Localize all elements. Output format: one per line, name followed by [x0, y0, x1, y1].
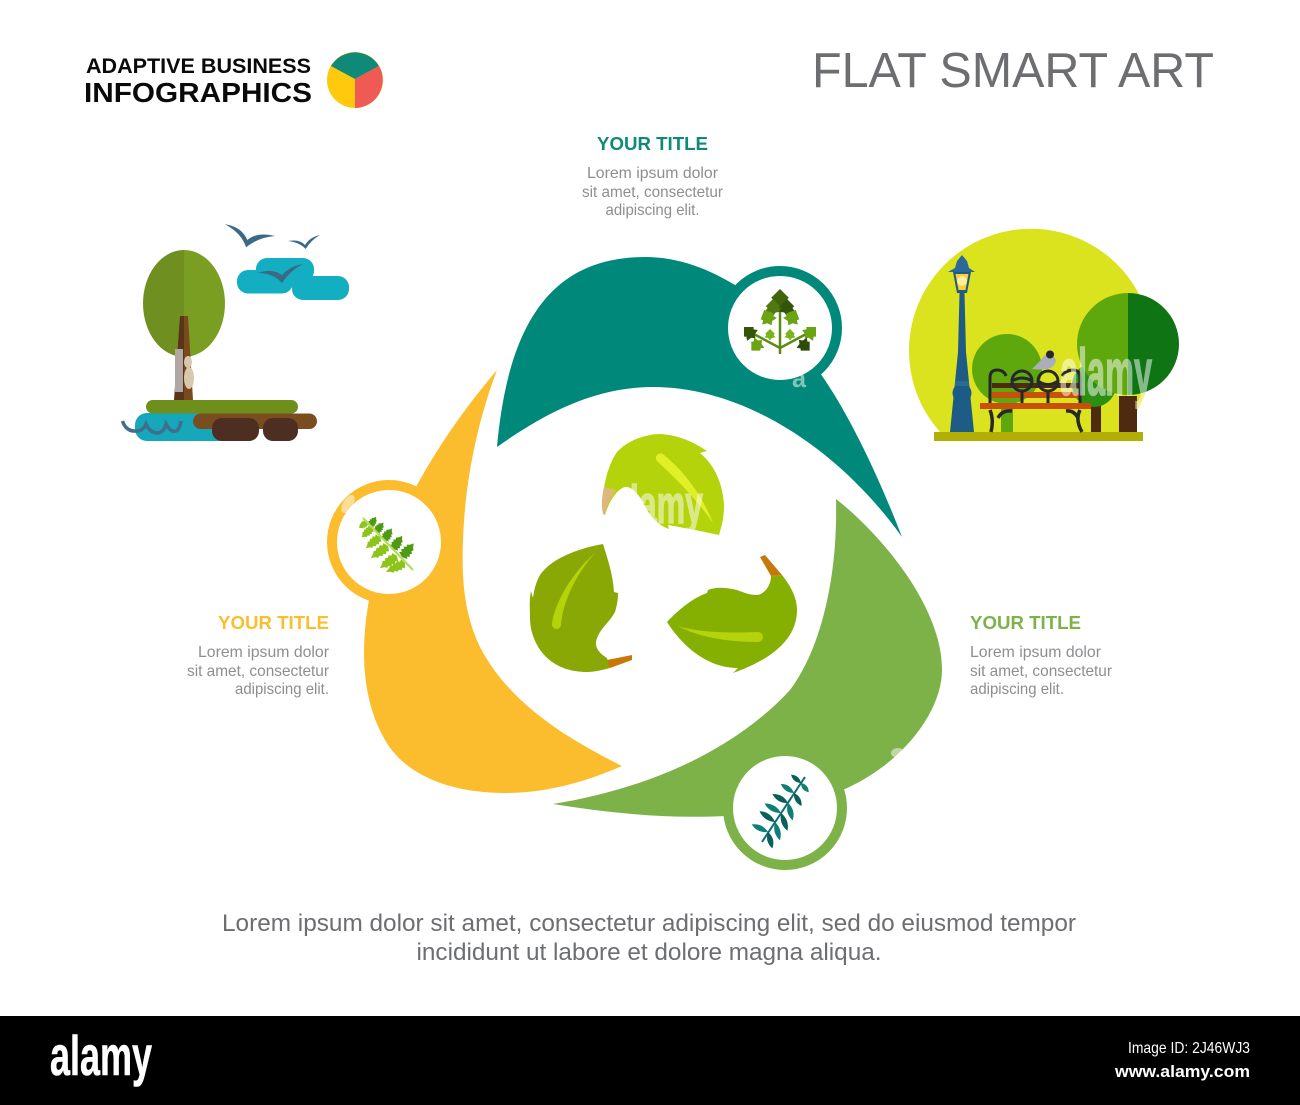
ring: fern	[332, 485, 446, 599]
text block: left: Lorem ipsum dolor	[198, 644, 330, 661]
text block: left: adipiscing elit.	[235, 681, 329, 698]
water	[135, 413, 222, 441]
segment watermark	[891, 748, 905, 758]
text block: right: sit amet, consectetur	[970, 663, 1113, 680]
logo: adaptive business infographics	[84, 52, 383, 108]
icon: fern	[357, 515, 418, 577]
ground	[934, 432, 1143, 441]
cycle segment: green	[553, 499, 942, 865]
small tree	[972, 334, 1042, 432]
leaf: top	[602, 434, 724, 535]
icon: ivy leaf	[739, 289, 821, 356]
watermark letter: a	[792, 363, 807, 393]
center leaves	[530, 434, 797, 673]
image id: Image ID: 2J46WJ3	[1128, 1040, 1250, 1057]
illustration: park bench and lamp	[909, 229, 1179, 441]
text block: right	[970, 612, 1113, 698]
text block: top	[582, 133, 724, 219]
rocks	[212, 418, 298, 441]
logo wordmark: ADAPTIVE BUSINESS	[86, 55, 311, 78]
tree trunk	[174, 316, 194, 400]
bottom caption: Lorem ipsum dolor sit amet, consectetur adipiscing elit, sed do eiusmod tempor	[222, 910, 1076, 937]
footer logo: alamy	[50, 1024, 152, 1087]
sun backdrop	[909, 229, 1153, 432]
footer bar	[0, 1016, 1300, 1105]
ring watermark	[339, 493, 357, 515]
birds	[225, 224, 320, 283]
logo wordmark	[84, 55, 312, 108]
text block: right: YOUR TITLE	[970, 612, 1081, 633]
bottom caption: incididunt ut labore et dolore magna aliqua.	[416, 939, 882, 966]
medium tree	[1072, 363, 1116, 432]
leaf watermark: alamy	[612, 475, 703, 535]
icon: rosemary sprig	[750, 773, 811, 849]
text block: left: sit amet, consectetur	[187, 663, 330, 680]
cycle segment: teal	[497, 257, 902, 537]
ring: ivy leaf	[723, 271, 837, 385]
soil	[193, 414, 317, 429]
street lamp	[948, 255, 975, 432]
logo pie icon	[327, 52, 383, 108]
website: www.alamy.com	[1114, 1062, 1250, 1081]
grass	[146, 400, 298, 414]
text block: right: Lorem ipsum dolor	[970, 644, 1102, 661]
text block: top: Lorem ipsum dolor	[587, 165, 719, 182]
text block: top: YOUR TITLE	[597, 133, 708, 154]
text block: top: sit amet, consectetur	[582, 184, 724, 201]
text block: left	[187, 612, 330, 698]
main title: FLAT SMART ART	[812, 44, 1214, 98]
text block: right: adipiscing elit.	[970, 681, 1064, 698]
bottom caption	[222, 910, 1076, 966]
ring: rosemary	[728, 751, 842, 865]
logo wordmark: INFOGRAPHICS	[84, 77, 312, 108]
large tree	[1077, 293, 1179, 432]
cycle segment: yellow	[332, 370, 622, 793]
illustration: tree, island and birds	[122, 224, 349, 441]
waves	[122, 421, 181, 433]
text block: top: adipiscing elit.	[606, 202, 700, 219]
leaf: right	[667, 555, 797, 673]
bench	[980, 370, 1091, 432]
tree crown	[143, 250, 225, 357]
clouds	[237, 258, 349, 300]
leaf: left	[530, 544, 632, 672]
text block: left: YOUR TITLE	[218, 612, 329, 633]
bird on bench	[1032, 350, 1056, 370]
illustration: park bench and lamp: alamy	[1060, 335, 1152, 409]
